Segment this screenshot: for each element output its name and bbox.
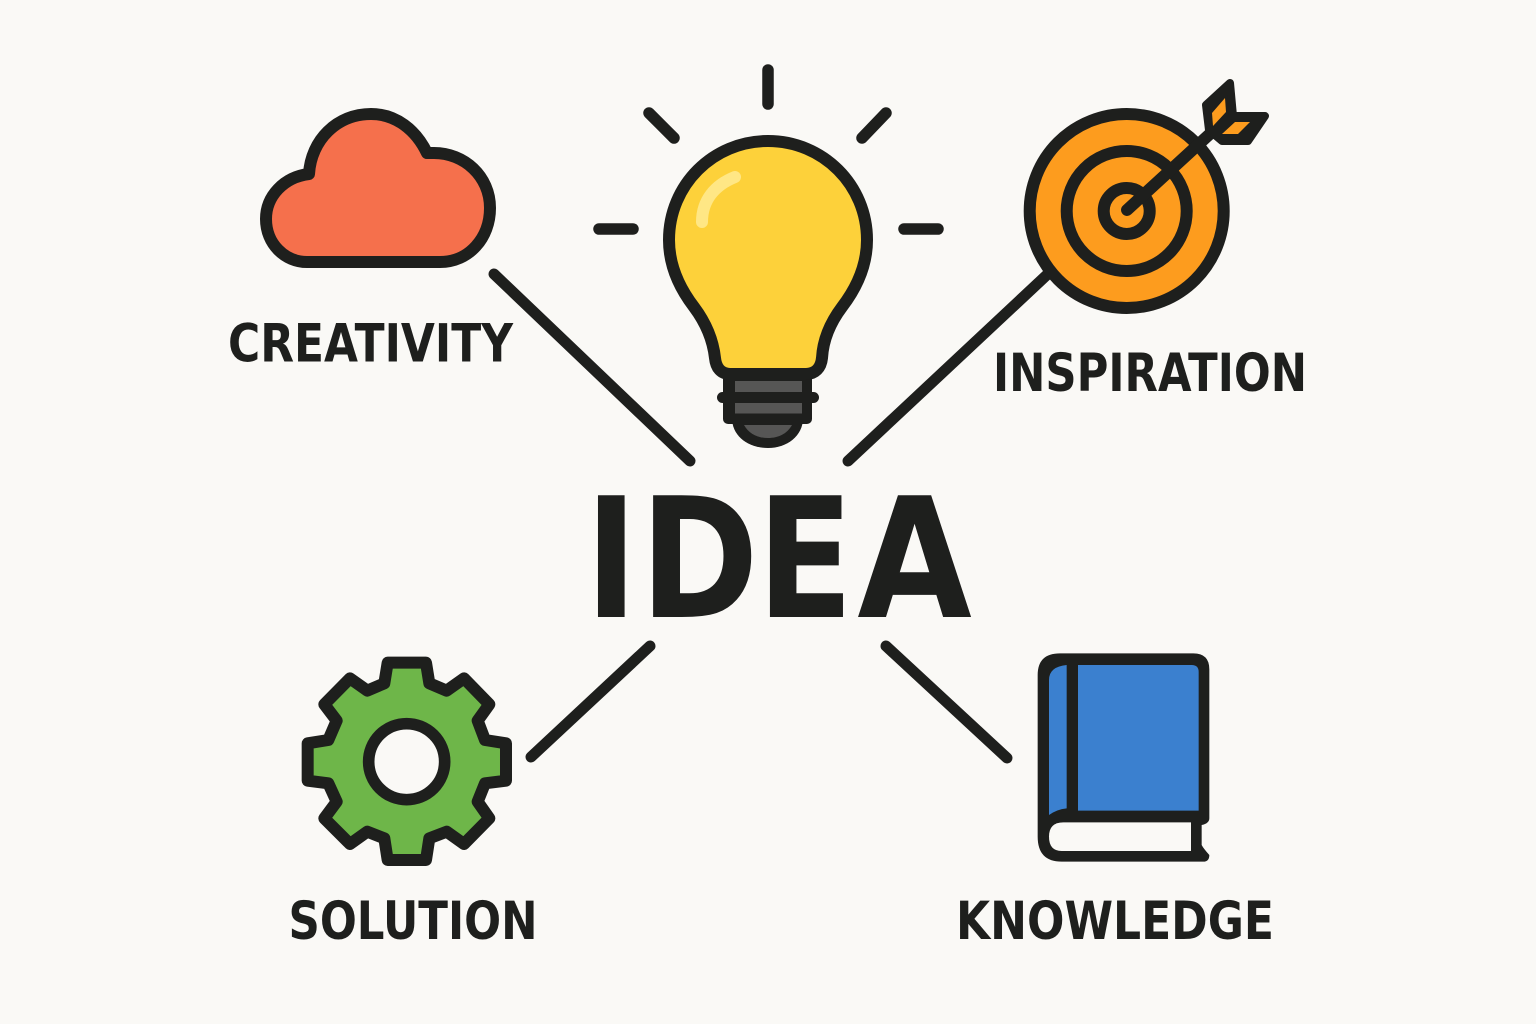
icon: gear xyxy=(308,663,506,860)
title: IDEA: E xyxy=(757,464,853,657)
connector: solution to idea xyxy=(531,646,650,757)
connector: creativity to idea xyxy=(494,274,690,461)
label: creativity: CREATIVITY xyxy=(228,314,514,374)
title: IDEA: A xyxy=(857,464,972,657)
label: solution: SOLUTION xyxy=(288,891,538,952)
icon: cloud xyxy=(266,114,490,262)
title: IDEA: D xyxy=(640,462,759,657)
icon: book xyxy=(1038,653,1209,862)
label: inspiration: INSPIRATION xyxy=(993,343,1307,404)
connector: knowledge to idea xyxy=(886,646,1007,758)
title: IDEA: I xyxy=(585,463,638,657)
connector: inspiration to idea xyxy=(848,272,1050,461)
icon: target with arrow xyxy=(1030,83,1265,308)
icon: light rays xyxy=(599,70,938,229)
label: knowledge: KNOWLEDGE xyxy=(956,891,1274,952)
title: IDEA xyxy=(585,462,972,657)
icon: light bulb xyxy=(669,141,867,448)
